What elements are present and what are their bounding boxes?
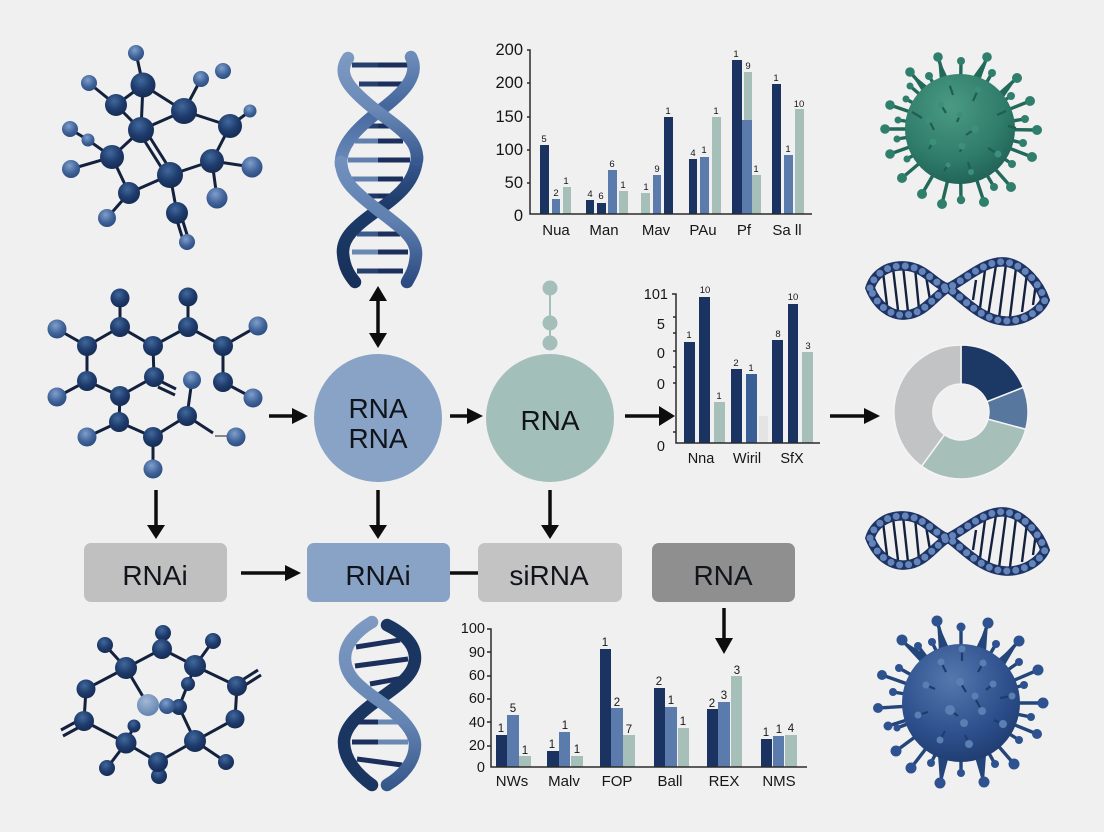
y axis labels [461,621,485,776]
category labels: Malv [548,773,580,790]
value labels: 1 [522,745,528,757]
arrow: down to siRNA [541,490,559,539]
bar chart: middle [644,285,820,467]
value labels: 6 [598,191,604,202]
box: siRNA [478,543,622,602]
y axis labels: 101 [644,287,668,303]
segment: gray [894,345,961,466]
category labels: NWs [496,773,528,790]
icon: DNA strand horizontal upper [870,262,1045,321]
icon: DNA helix bottom [344,622,415,785]
value labels: 1 [748,363,754,374]
value labels: 2 [733,358,739,369]
bar chart: top [495,41,812,239]
category labels: Ball [657,773,683,790]
segment: blue [987,387,1028,429]
segment: green [922,419,1026,479]
y axis labels: 50 [505,174,523,192]
icon: molecule bottom left [61,625,261,784]
value labels [686,285,811,402]
y axis labels: 0 [477,760,485,776]
value labels: 1 [574,744,580,756]
segment: dark [961,345,1023,402]
value labels: 1 [753,164,759,175]
value labels: 8 [775,329,781,340]
category labels [496,773,796,790]
value labels: 1 [763,727,769,739]
category labels: NMS [762,773,796,790]
circle: RNA [486,354,614,482]
arrow: molecule to RNA [269,408,308,424]
category labels: Pf [737,222,752,239]
value labels [541,49,804,202]
arrow: RNA to RNA [450,408,483,424]
category labels: Mav [642,222,671,239]
value labels: 2 [553,188,559,199]
y axis labels: 40 [469,715,485,731]
category labels: SfX [780,451,804,467]
category labels [542,222,802,239]
arrow: chart to donut [830,408,880,424]
value labels: 1 [776,724,782,736]
y axis labels: 0 [657,346,665,362]
y axis labels: 0 [657,439,665,455]
value labels: 1 [686,330,692,341]
value labels: 1 [563,176,569,187]
y axis labels: 0 [514,207,523,225]
value labels: 1 [701,145,707,156]
value labels: 10 [794,99,804,110]
icon: DNA strand horizontal lower [870,512,1045,571]
box: RNAi center: RNAi [345,560,411,591]
value labels: 1 [665,106,671,117]
category labels: FOP [602,773,632,790]
icon: green virus [880,52,1042,209]
value labels: 3 [721,690,727,702]
y axis labels: 200 [495,74,523,92]
box: RNA dark: RNA [693,560,753,591]
value labels [498,637,795,757]
circle: RNA RNA: RNA [348,393,408,424]
value labels: 1 [733,49,739,60]
bar chart: bottom [461,621,807,790]
y axis labels [495,41,523,225]
connector: RNAi to siRNA [450,571,478,575]
value labels: 3 [734,665,740,677]
arrow: RNA to chart [625,406,675,426]
axes [527,50,812,214]
donut chart [894,345,1028,479]
value labels: 7 [626,724,632,736]
y axis labels: 90 [469,645,485,661]
y axis labels: 60 [469,691,485,707]
arrow: RNAi to RNAi [241,565,301,581]
value labels: 1 [716,391,722,402]
bars [684,297,813,443]
category labels: PAu [689,222,717,239]
y axis labels [644,287,668,455]
bars [540,60,804,214]
value labels: 9 [745,61,751,72]
icon: molecule top left [62,45,262,250]
value labels: 4 [690,148,696,159]
box: siRNA: siRNA [509,560,589,591]
arrow: down to RNAi [147,490,165,539]
value labels: 1 [620,180,626,191]
value labels: 1 [562,720,568,732]
value labels: 1 [713,106,719,117]
value labels: 1 [773,73,779,84]
circle: RNA RNA: RNA [348,423,408,454]
icon: molecule middle left [48,288,268,478]
category labels: REX [709,773,739,790]
value labels: 3 [805,341,811,352]
value labels: 2 [709,698,715,710]
y axis labels: 100 [461,621,485,637]
y axis labels: 150 [495,108,523,126]
value labels: 10 [788,292,798,303]
y axis labels: 200 [495,41,523,59]
category labels: Nna [688,451,715,467]
arrow: RNA box to chart [715,608,733,654]
value labels: 4 [587,189,593,200]
value labels: 1 [680,716,686,728]
circle: RNA RNA [314,354,442,482]
category labels: Wiril [733,451,761,467]
value labels: 2 [614,697,620,709]
box: RNA dark [652,543,795,602]
y axis labels: 20 [469,738,485,754]
bars [496,649,797,767]
box: RNAi left [84,543,227,602]
category labels: Man [589,222,619,239]
y axis labels: 60 [469,668,485,684]
y axis labels: 5 [657,317,665,333]
axes [672,294,820,443]
value labels: 4 [788,723,795,735]
icon: small connector balls [542,280,558,350]
value labels: 9 [654,164,660,175]
box: RNAi left: RNAi [122,560,188,591]
value labels: 6 [609,159,615,170]
value labels: 2 [656,676,662,688]
value labels: 1 [643,182,649,193]
value labels: 10 [700,285,710,296]
circle: RNA: RNA [520,405,580,436]
arrow: down to RNAi center [369,490,387,539]
arrow: double vertical [369,286,387,348]
category labels [688,451,804,467]
y axis labels: 0 [657,377,665,393]
value labels: 1 [498,723,504,735]
value labels: 1 [549,739,555,751]
category labels: Sa ll [772,222,802,239]
box: RNAi center [307,543,450,602]
icon: DNA helix top [341,57,417,282]
category labels: Nua [542,222,570,239]
value labels: 5 [510,703,516,715]
value labels: 5 [541,134,547,145]
value labels: 1 [785,144,791,155]
icon: blue virus [873,616,1048,788]
value labels: 1 [602,637,608,649]
axes [487,629,807,767]
y axis labels: 100 [495,141,523,159]
value labels: 1 [668,695,674,707]
